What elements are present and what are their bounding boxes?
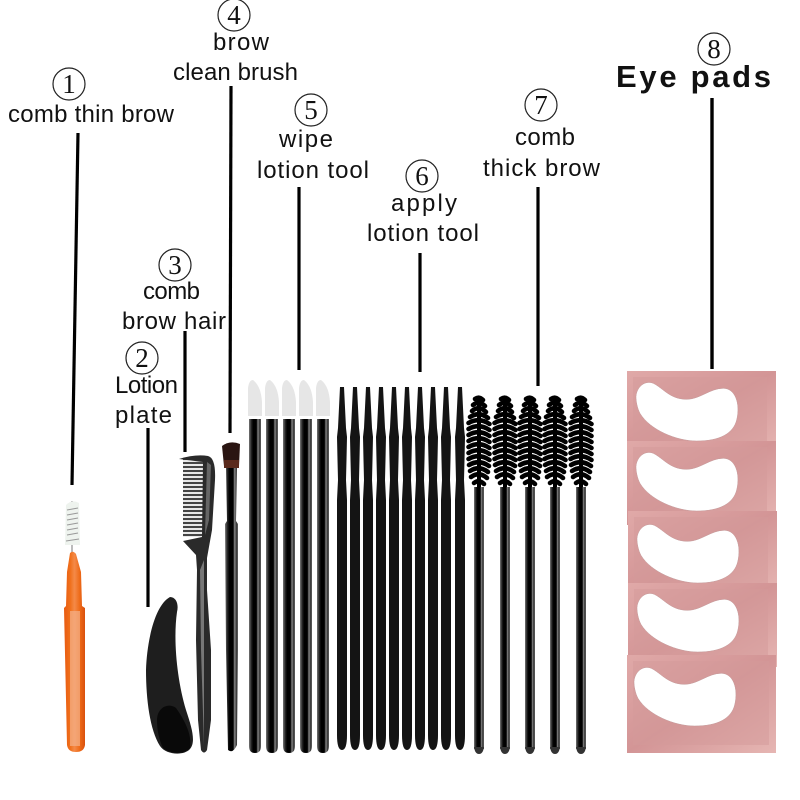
label 1: comb thin brow: 1 [62,69,76,99]
item 5: wipe lotion tools [248,380,330,753]
label 4: brow clean brush [173,0,298,433]
label 2: lotion plate: Lotion [115,372,178,399]
label 7: comb thick brow [483,89,601,386]
label 3: comb brow hair: 3 [168,250,182,280]
label 5: wipe lotion tool [257,94,369,370]
label 3: comb brow hair: comb [143,278,200,305]
label 1: comb thin brow [8,68,175,485]
label 4: brow clean brush: brow [213,29,270,56]
label 5: wipe lotion tool: wipe [278,126,333,153]
label 2: lotion plate [115,342,178,607]
label 1: comb thin brow: comb thin brow [8,101,175,128]
label 8: eye pads: Eye pads [616,59,771,94]
item 8: eye pads in pink packets [627,371,777,753]
label 3: comb brow hair: brow hair [122,308,226,335]
label 2: lotion plate: plate [115,402,172,429]
label 7: comb thick brow: 7 [534,90,548,120]
label 4: brow clean brush: clean brush [173,59,298,86]
label 6: apply lotion tool: lotion tool [367,220,479,247]
label 4: brow clean brush: 4 [227,0,241,30]
label 6: apply lotion tool: 6 [415,161,429,191]
item 4: brow clean brush [222,442,240,751]
label 7: comb thick brow: comb [515,124,575,151]
label 8: eye pads [616,33,771,369]
label 8: eye pads: 8 [707,34,721,64]
label 6: apply lotion tool: apply [391,190,457,217]
item 6: apply lotion tools [337,387,465,750]
label 2: lotion plate: 2 [135,343,149,373]
label 7: comb thick brow: thick brow [483,155,601,182]
item 7: spoolie brushes [468,398,592,754]
label 3: comb brow hair [122,249,226,452]
label 6: apply lotion tool [367,160,479,372]
label 5: wipe lotion tool: 5 [304,95,318,125]
item 2: black lotion plate [146,597,193,754]
item 1: orange thin brow brush [64,501,85,752]
label 5: wipe lotion tool: lotion tool [257,157,369,184]
item 3: black tail comb [179,455,215,752]
